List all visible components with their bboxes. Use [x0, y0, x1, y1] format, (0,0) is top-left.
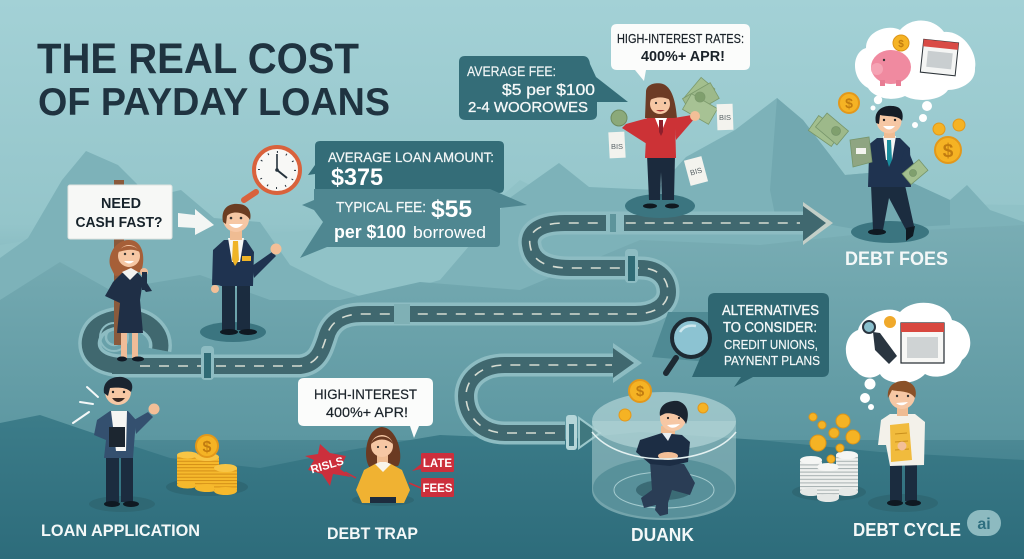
icon: burst lines: [73, 387, 98, 423]
speech bubble: high-interest 400%: [298, 378, 433, 438]
tag: fees: FEES: [422, 483, 453, 495]
tag: risks burst: [305, 444, 356, 486]
callout: alternatives: CREDIT UNIONS,: [724, 338, 818, 352]
icon: cash left: [611, 110, 627, 126]
callout: average loan amount: [308, 141, 504, 193]
glass cylinder with sinking man: [592, 380, 736, 520]
thought cloud: piggy bank and calendar: [855, 20, 975, 128]
speech bubble: high-interest rates: HIGH-INTEREST RATES:: [617, 32, 744, 46]
icon: gold coins upper right: $: [943, 141, 954, 162]
label: duank: DUANK: [631, 525, 694, 545]
sign: need cash fast: CASH FAST?: [76, 215, 163, 231]
thought cloud: magnifier and calendar: [846, 303, 970, 410]
icon: bis slips: BIS: [719, 113, 731, 122]
icon: gold coin stacks: [166, 435, 248, 496]
callout: typical fee: TYPICAL FEE:: [336, 200, 426, 216]
road: lower path with arrow: [466, 343, 642, 450]
label: debt trap: DEBT TRAP: [327, 525, 418, 543]
tag: late: LATE: [423, 458, 452, 470]
road gate marker upper: [625, 249, 638, 283]
badge: ai: ai: [977, 516, 991, 533]
callout: alternatives: ALTERNATIVES: [722, 303, 819, 319]
icon: gold coin stacks: $: [203, 439, 212, 456]
callout: average fee: 2-4 WOOROWES: [468, 99, 588, 116]
icon: money and bag in man's hands: [808, 113, 928, 184]
icon: bis slips: [608, 104, 733, 186]
badge: ai: [967, 510, 1001, 536]
speech bubble: high-interest rates: [611, 24, 750, 81]
tag: risks burst: RISLS: [309, 455, 346, 476]
character: man with book: [89, 377, 160, 512]
character: man with money: [851, 106, 929, 243]
callout: alternatives: [652, 293, 829, 387]
callout: average fee: AVERAGE FEE:: [467, 64, 556, 79]
title: OF PAYDAY LOANS: [38, 81, 390, 124]
speech bubble: high-interest rates: 400%+ APR!: [641, 49, 725, 65]
callout: average fee: [459, 56, 628, 120]
icon: cash fan right: [683, 77, 719, 124]
road: main winding path with arrow: [90, 202, 833, 366]
icon: clock magnifier: [244, 147, 300, 200]
callout: typical fee: per $100: [334, 222, 406, 242]
title: [37, 35, 390, 124]
tag: late: [412, 453, 454, 472]
character: man with folder: [868, 381, 938, 512]
callout: average loan amount: $375: [331, 164, 383, 191]
callout: alternatives: PAYNENT PLANS: [724, 354, 820, 368]
icon: gold coins upper right: [839, 93, 965, 163]
callout: typical fee: borrowed: [413, 223, 486, 242]
thought cloud: piggy bank and calendar: $: [898, 39, 904, 50]
character: suited advisor: [200, 204, 282, 342]
character: worried woman: [352, 427, 414, 506]
glass cylinder with sinking man: $: [636, 383, 645, 400]
icon: bis slips: BIS: [689, 166, 703, 177]
callout: average fee: $5 per $100: [502, 82, 595, 99]
sign: need cash fast: NEED: [101, 196, 141, 212]
icon: gold coins upper right: $: [845, 95, 853, 111]
icon: magnifying glass: [666, 319, 710, 373]
speech bubble: high-interest 400%: HIGH-INTEREST: [314, 387, 417, 402]
label: debt cycle: DEBT CYCLE: [853, 520, 961, 540]
callout: typical fee: $55: [431, 196, 472, 223]
title: THE REAL COST: [37, 35, 359, 83]
arrow: sign to advisor: [178, 209, 214, 235]
speech bubble: high-interest 400%: 400%+ APR!: [326, 405, 408, 420]
icon: bis slips: BIS: [611, 142, 623, 151]
tag: fees: [409, 478, 454, 497]
callout: typical fee: [300, 189, 527, 258]
label: debt foes: DEBT FOES: [845, 249, 948, 270]
character: woman on phone: [105, 240, 152, 362]
road gate marker left: [201, 346, 214, 380]
label: loan application: LOAN APPLICATION: [41, 521, 200, 540]
icon: silver coin stacks with gold coins: [792, 413, 866, 502]
callout: average loan amount: AVERAGE LOAN AMOUNT:: [328, 150, 494, 165]
character: woman with cash: [622, 83, 695, 218]
callout: alternatives: TO CONSIDER:: [723, 320, 817, 336]
sign: need cash fast: [68, 180, 172, 345]
